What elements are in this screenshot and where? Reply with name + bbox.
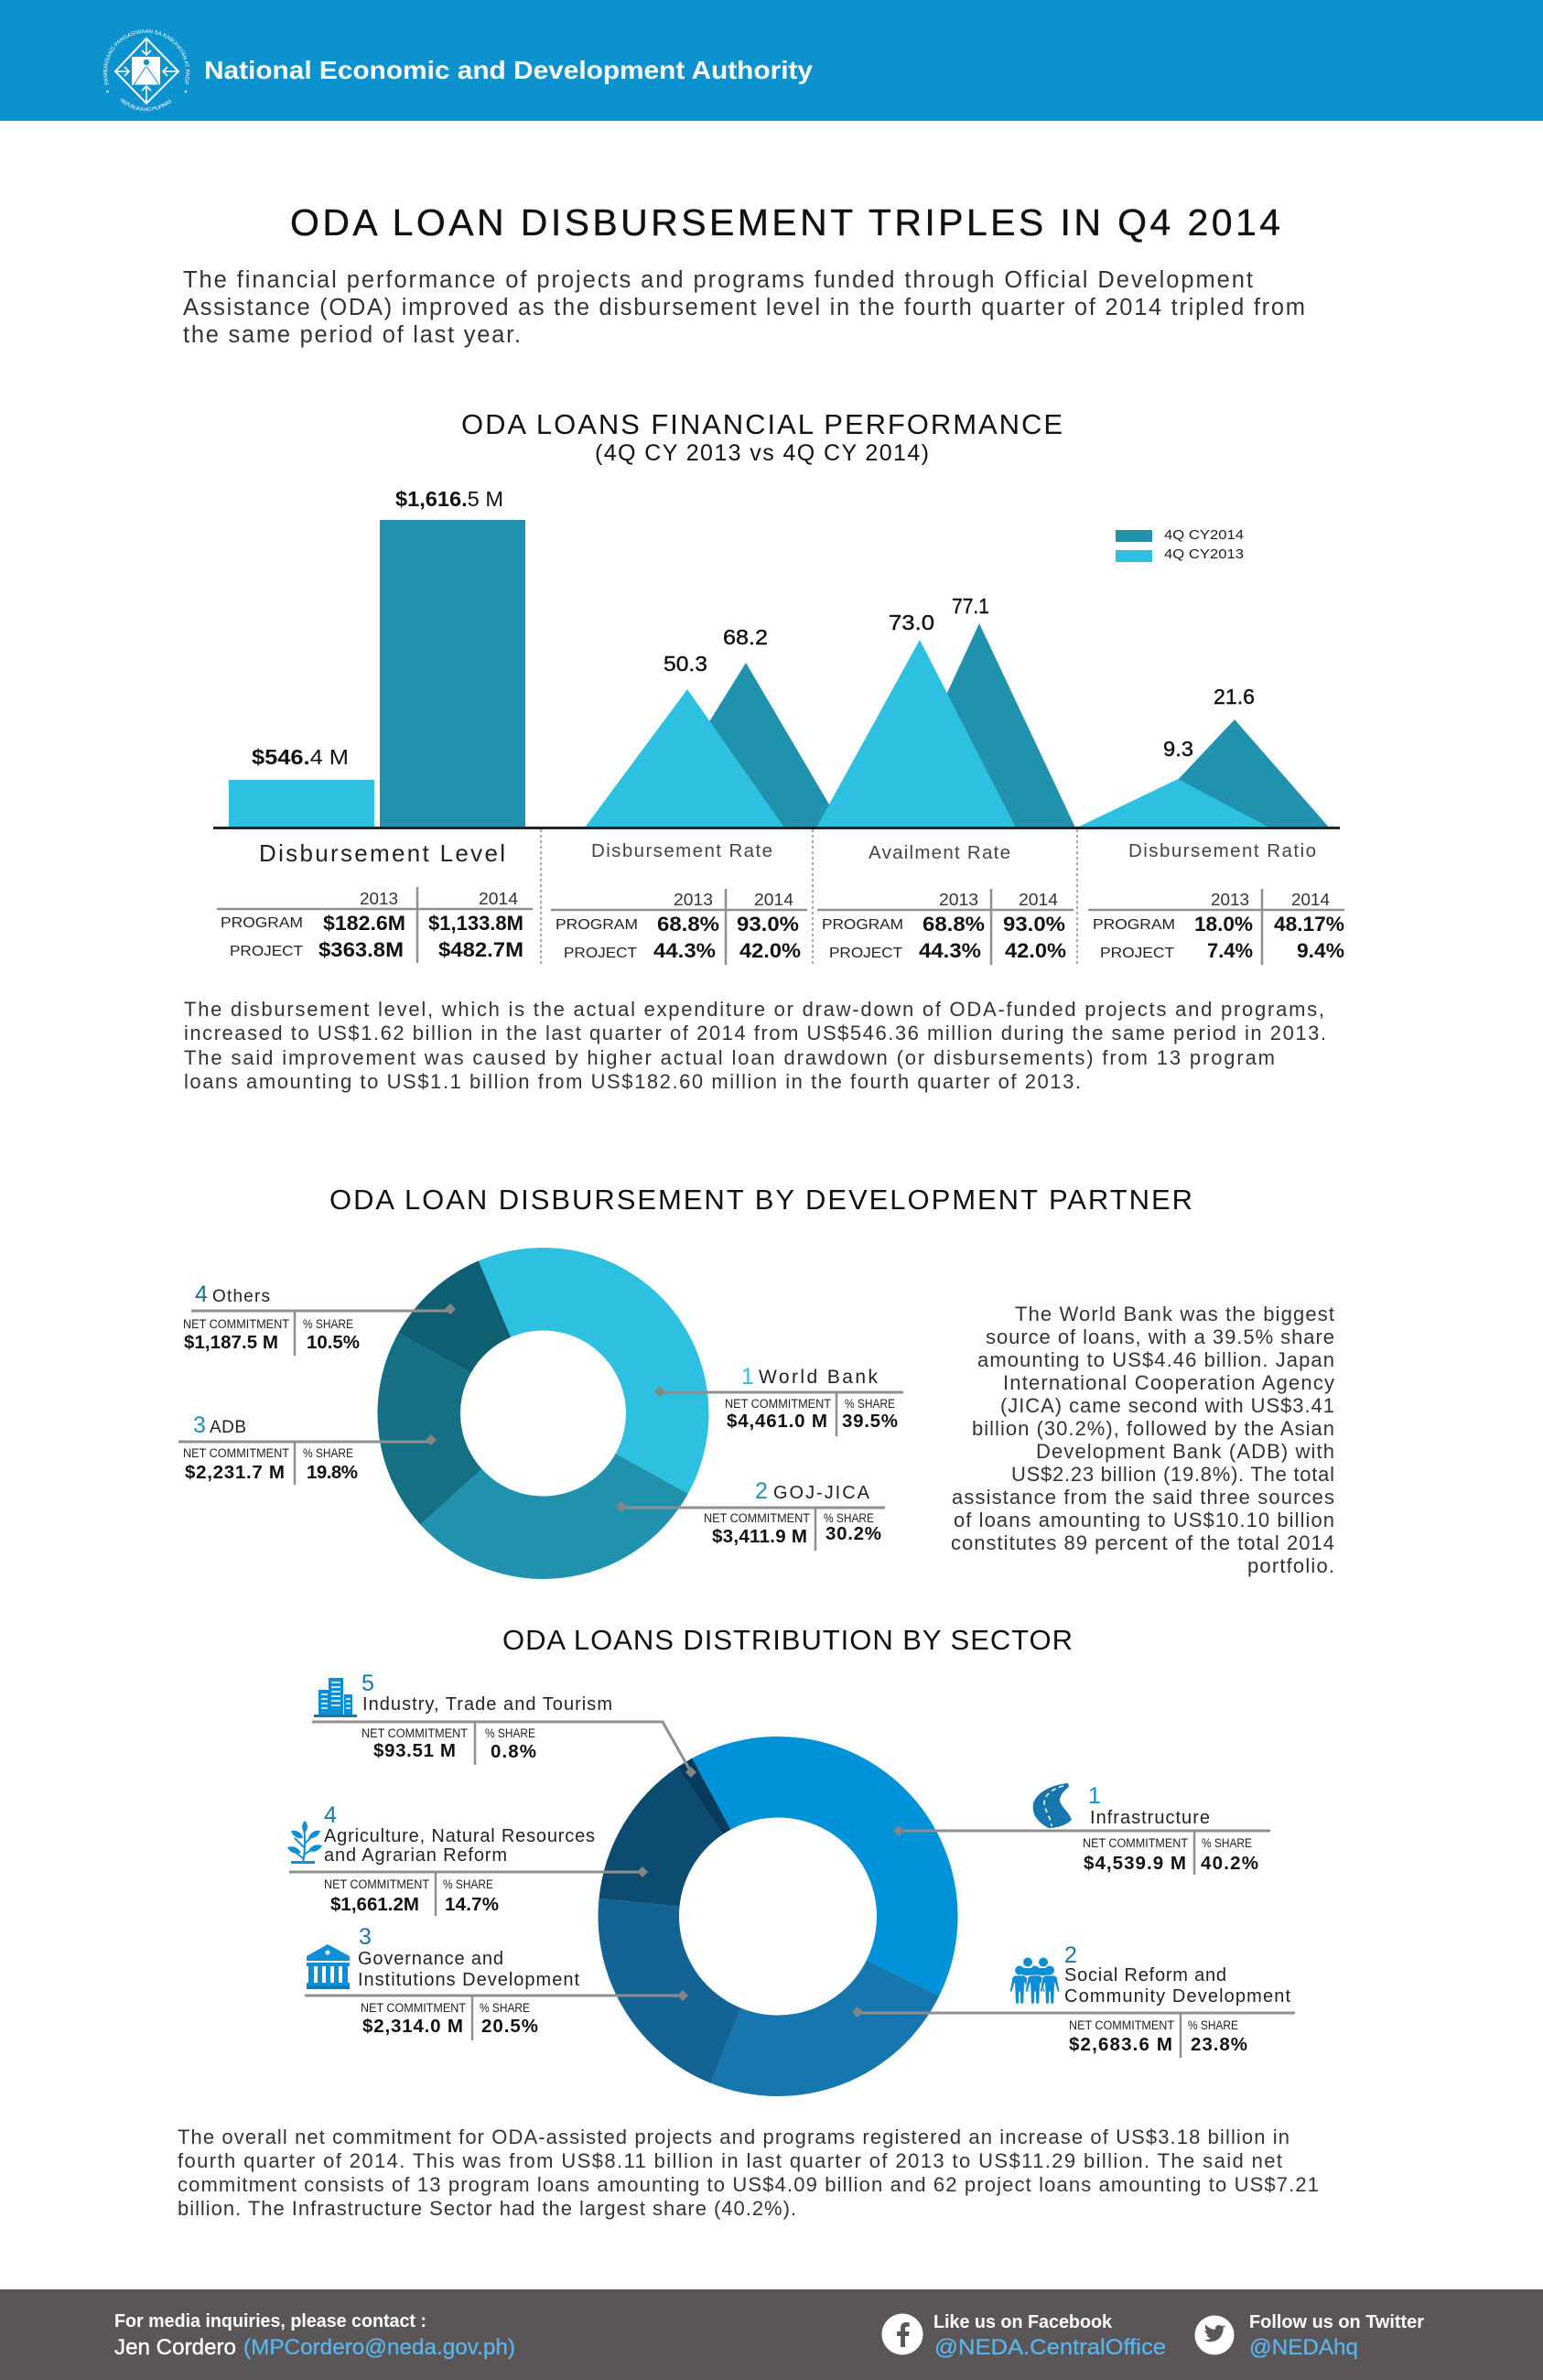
callout: agriculture: 4 bbox=[324, 1802, 337, 1828]
triangles: disbursement rate bbox=[585, 663, 844, 829]
callout: others: $1,187.5 M bbox=[184, 1332, 278, 1353]
callout: World Bank bbox=[654, 1364, 903, 1436]
callout: ADB: $2,231.7 M bbox=[185, 1462, 285, 1483]
table: availment rate: 93.0% bbox=[1003, 913, 1065, 936]
icon: facebook bbox=[882, 2314, 923, 2354]
callout: agriculture: Agriculture, Natural Resources bbox=[324, 1826, 595, 1846]
table: disbursement ratio: 48.17% bbox=[1274, 913, 1344, 936]
callout: governance: Governance and bbox=[358, 1949, 503, 1969]
callout: GOJ-JICA: GOJ-JICA bbox=[773, 1483, 870, 1503]
media contact bbox=[114, 2311, 515, 2360]
callout: GOJ-JICA: 2 bbox=[755, 1478, 768, 1504]
callout: agriculture: $1,661.2M bbox=[330, 1894, 419, 1915]
callout: ADB: 19.8% bbox=[307, 1462, 358, 1483]
callout: social reform: Social Reform and bbox=[1064, 1965, 1226, 1985]
callout: social reform: Community Development bbox=[1064, 1986, 1290, 2007]
paragraph: World Bank summary: US$2.23 billion (19.8%). The total bbox=[1011, 1463, 1334, 1486]
value labels: 68.2 bbox=[723, 625, 768, 649]
paragraph: net commitment: The overall net commitment for ODA-assisted projects and programs registered an increase of US$3.18 billion in bbox=[178, 2126, 1289, 2148]
intro paragraph bbox=[183, 267, 1305, 348]
media contact: (MPCordero@neda.gov.ph) bbox=[243, 2335, 515, 2360]
paragraph: disbursement level: The said improvement was caused by higher actual loan drawdown (or disbursements) from 13 program bbox=[184, 1046, 1275, 1069]
table: disbursement ratio: 2014 bbox=[1291, 891, 1330, 909]
chart: financial performance bbox=[213, 487, 1340, 829]
table: availment rate: 2014 bbox=[1019, 891, 1058, 909]
table: disbursement rate bbox=[551, 840, 807, 965]
twitter text bbox=[1249, 2312, 1424, 2360]
value labels bbox=[252, 487, 1255, 769]
callout: GOJ-JICA: % SHARE bbox=[824, 1511, 874, 1525]
callout: social reform bbox=[852, 1942, 1295, 2058]
paragraph: World Bank summary: of loans amounting to US$10.10 billion bbox=[954, 1509, 1334, 1531]
heading: financial performance: (4Q CY 2013 vs 4Q CY 2014) bbox=[595, 440, 929, 466]
value labels: 77.1 bbox=[952, 594, 989, 618]
callout: GOJ-JICA: $3,411.9 M bbox=[712, 1526, 807, 1547]
icon: NEDA logo bbox=[103, 29, 190, 112]
paragraph: net commitment bbox=[178, 2126, 1319, 2220]
footer band bbox=[0, 2289, 1543, 2380]
icon: people bbox=[1009, 1957, 1060, 2004]
callout: World Bank: 39.5% bbox=[842, 1411, 898, 1432]
callout: agriculture: and Agrarian Reform bbox=[324, 1845, 507, 1866]
separators bbox=[541, 829, 1077, 965]
callout: industry: Industry, Trade and Tourism bbox=[362, 1694, 612, 1715]
table: disbursement rate: Disbursement Rate bbox=[591, 840, 772, 861]
paragraph: World Bank summary: The World Bank was the biggest bbox=[1015, 1303, 1334, 1325]
donut chart: sector bbox=[599, 1736, 958, 2096]
table: disbursement level: 2014 bbox=[479, 890, 518, 908]
callout: governance: Institutions Development bbox=[358, 1970, 579, 1990]
callout: infrastructure: 1 bbox=[1088, 1783, 1101, 1809]
bar: disbursement level 2013 bbox=[229, 780, 374, 828]
table: disbursement ratio: 2013 bbox=[1211, 891, 1249, 909]
table: disbursement rate: 42.0% bbox=[739, 939, 801, 962]
paragraph: World Bank summary: (JICA) came second with US$3.41 bbox=[1000, 1394, 1334, 1417]
intro paragraph: the same period of last year. bbox=[183, 322, 521, 348]
callout: social reform: % SHARE bbox=[1188, 2018, 1238, 2032]
table: availment rate: 44.3% bbox=[919, 939, 981, 962]
table: availment rate: PROJECT bbox=[829, 946, 902, 961]
table: disbursement rate: PROJECT bbox=[564, 946, 637, 961]
donut chart: development partner bbox=[378, 1248, 708, 1579]
table: disbursement rate: 68.8% bbox=[657, 913, 719, 936]
callout: infrastructure: NET COMMITMENT bbox=[1083, 1836, 1188, 1850]
icon: NEDA logo: REPUBLIKA NG PILIPINAS bbox=[120, 98, 172, 112]
intro paragraph: Assistance (ODA) improved as the disbursement level in the fourth quarter of 2014 tripled from bbox=[183, 295, 1305, 320]
callout: others: % SHARE bbox=[303, 1317, 353, 1331]
callout: others: 10.5% bbox=[307, 1332, 360, 1353]
table: disbursement rate: 44.3% bbox=[653, 939, 716, 962]
callout: agriculture bbox=[287, 1802, 648, 1916]
table: disbursement level: PROGRAM bbox=[221, 915, 303, 931]
callout: others: Others bbox=[212, 1287, 270, 1306]
callout: social reform: $2,683.6 M bbox=[1069, 2034, 1172, 2055]
table: disbursement level: PROJECT bbox=[230, 944, 303, 959]
callout: industry: % SHARE bbox=[485, 1726, 535, 1740]
callout: infrastructure: % SHARE bbox=[1202, 1836, 1252, 1850]
paragraph: disbursement level: loans amounting to US$1.1 billion from US$182.60 million in the fourth quarter of 2013. bbox=[184, 1070, 1081, 1093]
facebook text: @NEDA.CentralOffice bbox=[934, 2335, 1166, 2360]
paragraph: World Bank summary: Development Bank (ADB) with bbox=[1036, 1440, 1334, 1463]
bar: disbursement level 2014 bbox=[380, 520, 525, 829]
callout: governance bbox=[305, 1924, 688, 2040]
table: availment rate: PROGRAM bbox=[822, 917, 903, 933]
twitter text: @NEDAhq bbox=[1249, 2335, 1358, 2360]
paragraph: World Bank summary: source of loans, with a 39.5% share bbox=[986, 1325, 1334, 1348]
table: availment rate bbox=[817, 842, 1074, 965]
callout: GOJ-JICA: 30.2% bbox=[825, 1523, 881, 1544]
callout: governance: $2,314.0 M bbox=[362, 2016, 463, 2037]
callout: ADB: NET COMMITMENT bbox=[183, 1446, 289, 1460]
legend: 4Q CY2014 bbox=[1164, 527, 1244, 543]
icon: plant bbox=[287, 1821, 322, 1864]
callout: industry bbox=[312, 1671, 696, 1778]
callout: World Bank: NET COMMITMENT bbox=[725, 1397, 831, 1411]
callout: infrastructure: 40.2% bbox=[1201, 1853, 1258, 1874]
callout: ADB bbox=[178, 1412, 437, 1485]
callout: agriculture: 14.7% bbox=[445, 1894, 499, 1915]
callout: ADB: 3 bbox=[193, 1412, 206, 1438]
table: disbursement rate: 2014 bbox=[754, 891, 793, 909]
table: disbursement level: $1,133.8M bbox=[428, 912, 523, 935]
table: disbursement rate: 93.0% bbox=[737, 913, 799, 936]
paragraph: disbursement level: increased to US$1.62 billion in the last quarter of 2014 from US$546.36 million during the same period in 2013. bbox=[184, 1022, 1326, 1044]
callout: others: NET COMMITMENT bbox=[183, 1317, 289, 1331]
callout: World Bank: % SHARE bbox=[845, 1397, 895, 1411]
callout: industry: 5 bbox=[361, 1671, 374, 1696]
table: disbursement level: $482.7M bbox=[438, 938, 523, 961]
table: disbursement level: $182.6M bbox=[323, 912, 405, 935]
icon: road bbox=[1033, 1783, 1072, 1828]
callout: others bbox=[183, 1282, 456, 1356]
table: disbursement level: 2013 bbox=[360, 890, 398, 908]
facebook text bbox=[933, 2312, 1166, 2360]
table: availment rate: 42.0% bbox=[1005, 939, 1066, 962]
callout: governance: 3 bbox=[359, 1924, 372, 1950]
legend: 4Q CY2013 bbox=[1164, 546, 1244, 562]
paragraph: World Bank summary: billion (30.2%), followed by the Asian bbox=[972, 1417, 1334, 1440]
paragraph: World Bank summary: International Cooperation Agency bbox=[1003, 1371, 1334, 1394]
value labels: $546. 4 M bbox=[252, 745, 349, 769]
paragraph: World Bank summary: assistance from the said three sources bbox=[952, 1486, 1334, 1509]
callout: agriculture: NET COMMITMENT bbox=[324, 1877, 429, 1891]
paragraph: net commitment: billion. The Infrastructure Sector had the largest share (40.2%). bbox=[178, 2197, 796, 2220]
twitter text: Follow us on Twitter bbox=[1249, 2312, 1424, 2332]
paragraph: World Bank summary: amounting to US$4.46 billion. Japan bbox=[977, 1348, 1334, 1371]
paragraph: World Bank summary: portfolio. bbox=[1247, 1554, 1334, 1577]
callout: GOJ-JICA bbox=[616, 1478, 885, 1551]
callout: ADB: % SHARE bbox=[303, 1446, 353, 1460]
callout: governance: NET COMMITMENT bbox=[361, 2001, 466, 2015]
callout: GOJ-JICA: NET COMMITMENT bbox=[704, 1511, 810, 1525]
value labels: 21.6 bbox=[1214, 685, 1255, 709]
table: disbursement ratio: PROGRAM bbox=[1093, 917, 1175, 933]
table: disbursement ratio bbox=[1088, 840, 1344, 965]
heading: financial performance: ODA LOANS FINANCIAL PERFORMANCE bbox=[461, 408, 1063, 440]
value labels: $1,616.5 M bbox=[395, 487, 503, 511]
table: availment rate: Availment Rate bbox=[869, 842, 1010, 863]
callout: agriculture: % SHARE bbox=[443, 1877, 493, 1891]
paragraph: net commitment: commitment consists of 13 program loans amounting to US$4.09 billion and 62 project loans amounting to US$7.21 bbox=[178, 2173, 1319, 2196]
table: availment rate: 2013 bbox=[939, 891, 978, 909]
value labels: 73.0 bbox=[889, 611, 934, 634]
paragraph: net commitment: fourth quarter of 2014. This was from US$8.11 billion in last quarter of 2013 to US$11.29 billion. The said net bbox=[178, 2149, 1282, 2172]
icon: twitter bbox=[1195, 2316, 1234, 2354]
icon: buildings bbox=[314, 1678, 357, 1717]
callout: governance: % SHARE bbox=[480, 2001, 530, 2015]
paragraph: World Bank summary: constitutes 89 percent of the total 2014 bbox=[951, 1531, 1334, 1554]
triangles: availment rate bbox=[816, 623, 1075, 828]
callout: World Bank: World Bank bbox=[759, 1367, 879, 1388]
legend bbox=[1116, 527, 1244, 562]
title: ODA LOAN DISBURSEMENT TRIPLES IN Q4 2014 bbox=[290, 201, 1280, 243]
intro paragraph: The financial performance of projects and programs funded through Official Development bbox=[183, 267, 1253, 293]
heading: by sector: ODA LOANS DISTRIBUTION BY SECTOR bbox=[502, 1624, 1073, 1656]
heading: financial performance bbox=[461, 408, 1063, 466]
table: disbursement level: Disbursement Level bbox=[259, 839, 505, 867]
table: disbursement rate: 2013 bbox=[674, 891, 713, 909]
callout: social reform: 23.8% bbox=[1191, 2034, 1247, 2055]
table: disbursement ratio: 7.4% bbox=[1207, 939, 1253, 962]
paragraph: disbursement level bbox=[184, 998, 1326, 1093]
callout: industry: 0.8% bbox=[491, 1741, 536, 1762]
table: availment rate: 68.8% bbox=[923, 913, 985, 936]
chart axis bbox=[213, 827, 1340, 829]
table: disbursement ratio: 18.0% bbox=[1194, 913, 1253, 936]
header band bbox=[0, 0, 1543, 121]
media contact: For media inquiries, please contact : bbox=[114, 2311, 426, 2331]
table: disbursement level: $363.8M bbox=[318, 938, 404, 961]
table: disbursement rate: PROGRAM bbox=[556, 917, 638, 933]
table: disbursement ratio: 9.4% bbox=[1297, 939, 1344, 962]
table: disbursement ratio: Disbursement Ratio bbox=[1128, 840, 1316, 861]
callout: infrastructure: $4,539.9 M bbox=[1084, 1853, 1186, 1874]
callout: infrastructure bbox=[893, 1783, 1270, 1875]
media contact: Jen Cordero bbox=[114, 2335, 236, 2360]
callout: infrastructure: Infrastructure bbox=[1090, 1808, 1210, 1828]
callout: industry: $93.51 M bbox=[373, 1740, 456, 1761]
organisation name: National Economic and Development Authority bbox=[204, 56, 814, 84]
value labels: 50.3 bbox=[664, 652, 707, 676]
callout: World Bank: 1 bbox=[741, 1364, 754, 1390]
icon: government building bbox=[307, 1944, 350, 1989]
callout: others: 4 bbox=[195, 1282, 208, 1307]
heading: by development partner: ODA LOAN DISBURSEMENT BY DEVELOPMENT PARTNER bbox=[329, 1184, 1192, 1216]
paragraph: World Bank summary bbox=[951, 1303, 1334, 1577]
paragraph: disbursement level: The disbursement level, which is the actual expenditure or draw-down of ODA-funded projects and programs, bbox=[184, 998, 1324, 1021]
value labels: 9.3 bbox=[1163, 737, 1193, 761]
callout: industry: NET COMMITMENT bbox=[361, 1726, 468, 1740]
triangles: disbursement ratio bbox=[1077, 719, 1331, 829]
callout: World Bank: $4,461.0 M bbox=[727, 1411, 827, 1432]
callout: governance: 20.5% bbox=[481, 2016, 538, 2037]
table: disbursement level bbox=[217, 839, 533, 963]
facebook text: Like us on Facebook bbox=[933, 2312, 1113, 2332]
callout: social reform: 2 bbox=[1064, 1942, 1077, 1968]
callout: ADB: ADB bbox=[210, 1418, 246, 1437]
callout: social reform: NET COMMITMENT bbox=[1069, 2018, 1174, 2032]
table: disbursement ratio: PROJECT bbox=[1100, 946, 1174, 961]
